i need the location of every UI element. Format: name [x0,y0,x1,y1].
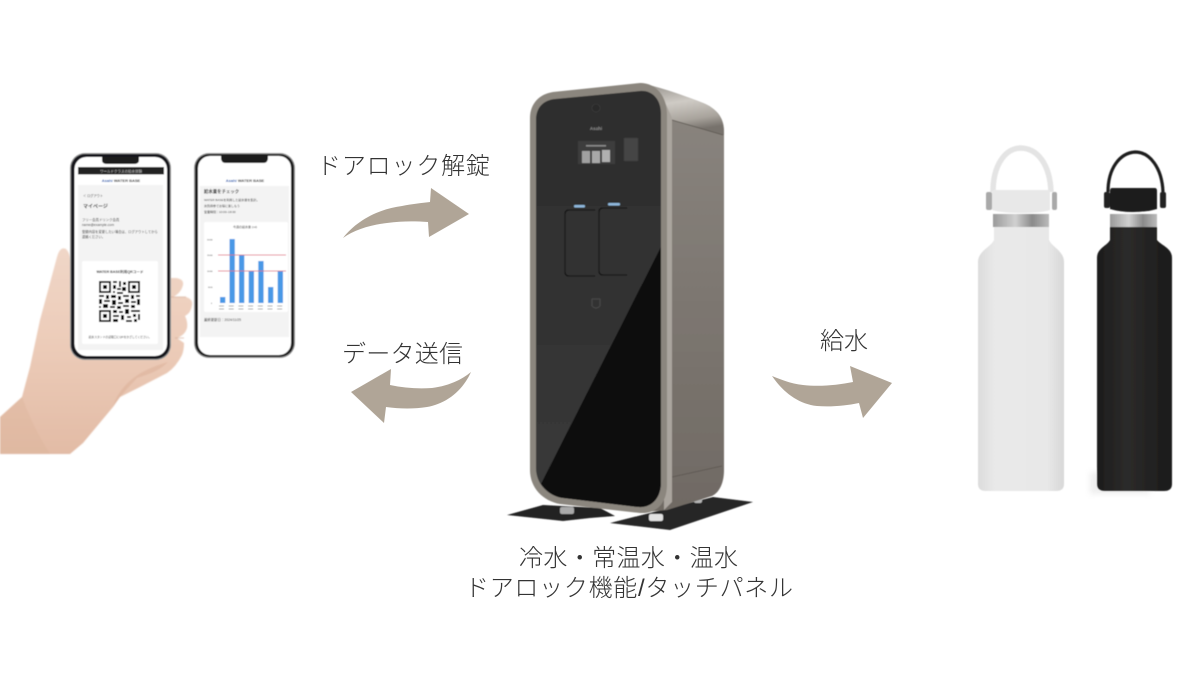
phone: my page with QR code: 給水スタンドの読取口にQRをかざしてください。 [89,335,151,339]
phone: my page with QR code [70,153,171,360]
body [1097,226,1172,491]
phone: water usage chart: 水筒持参でお得に楽しもう [204,203,240,208]
icon: QR code [99,281,140,322]
phone: my page with QR code: 登録内容を変更したい場合は、ログアウトしてから [82,229,158,234]
phone: water usage chart: 営業時間：10:00–18:00 [204,209,236,214]
arrow: data transmission [351,369,471,423]
bar chart: 20000 [207,240,213,242]
arrow: water supply [772,366,892,418]
phone: water usage chart: 今週の給水量 (ml) [233,224,257,229]
phone: my page with QR code: Asahi WATER BASE [102,178,141,183]
status light [574,205,585,208]
steel band [1110,214,1157,227]
door left [565,210,595,276]
label: dispenser features [465,545,793,602]
dispenser top curve [640,83,724,135]
phone: water usage chart: Asahi WATER BASE [226,178,265,183]
black bottle [1090,152,1172,494]
dispenser black glass front [536,91,661,507]
arrow: door lock release [343,188,469,238]
steel band [993,214,1049,227]
phone: my page with QR code: ワールドクラスの給水体験 [100,168,142,174]
dispenser front frame [530,83,667,513]
status light [608,203,620,206]
logo: Asahi [590,126,602,131]
dispenser feet [507,497,753,530]
white bottle [978,148,1064,491]
body [978,226,1064,491]
label: door lock release: ドアロック解錠 [317,153,490,180]
door right [599,208,627,275]
camera [592,104,600,112]
bright edge strip [664,100,672,510]
bar chart: 0 [211,303,213,305]
cap [1110,188,1157,212]
phone: my page with QR code: フリー会員ドリンク会員 [82,217,120,222]
phone: my page with QR code: マイページ [83,204,108,210]
sensor icon [592,299,600,308]
handle [993,148,1051,192]
bar chart [207,239,286,309]
phone: my page with QR code: WATER BASE利用QRコード [96,269,144,274]
reader panel [624,138,638,161]
phone: water usage chart: 最終更新日：2024/11/25 [204,317,241,322]
touch panel [578,141,615,164]
phone: water usage chart: 給水量をチェック [204,188,239,195]
handle [1108,152,1163,192]
shadow [1090,472,1150,494]
phone: my page with QR code: ＜ ログアウト [83,193,103,198]
hand holding phone [0,248,192,454]
glass reflection [541,247,661,507]
phone: water usage chart: WATER BASEを利用した給水量を集計。 [204,197,259,202]
bar chart: 15000 [207,255,213,257]
bar chart: 5000 [208,287,213,289]
label: data transmission: データ送信 [342,341,463,368]
label: dispenser features: ドアロック機能/タッチパネル [465,575,793,602]
dispenser side panel [640,83,724,512]
phone: water usage chart [194,153,295,358]
label: water supply: 給水 [820,328,868,355]
bar chart: 10000 [207,271,213,273]
phone: my page with QR code: name@example.com [82,223,114,227]
cap [992,190,1050,213]
dispenser [507,83,753,530]
label: dispenser features: 冷水・常温水・温水 [519,545,738,572]
phone: my page with QR code: 連絡ください。 [82,234,105,239]
